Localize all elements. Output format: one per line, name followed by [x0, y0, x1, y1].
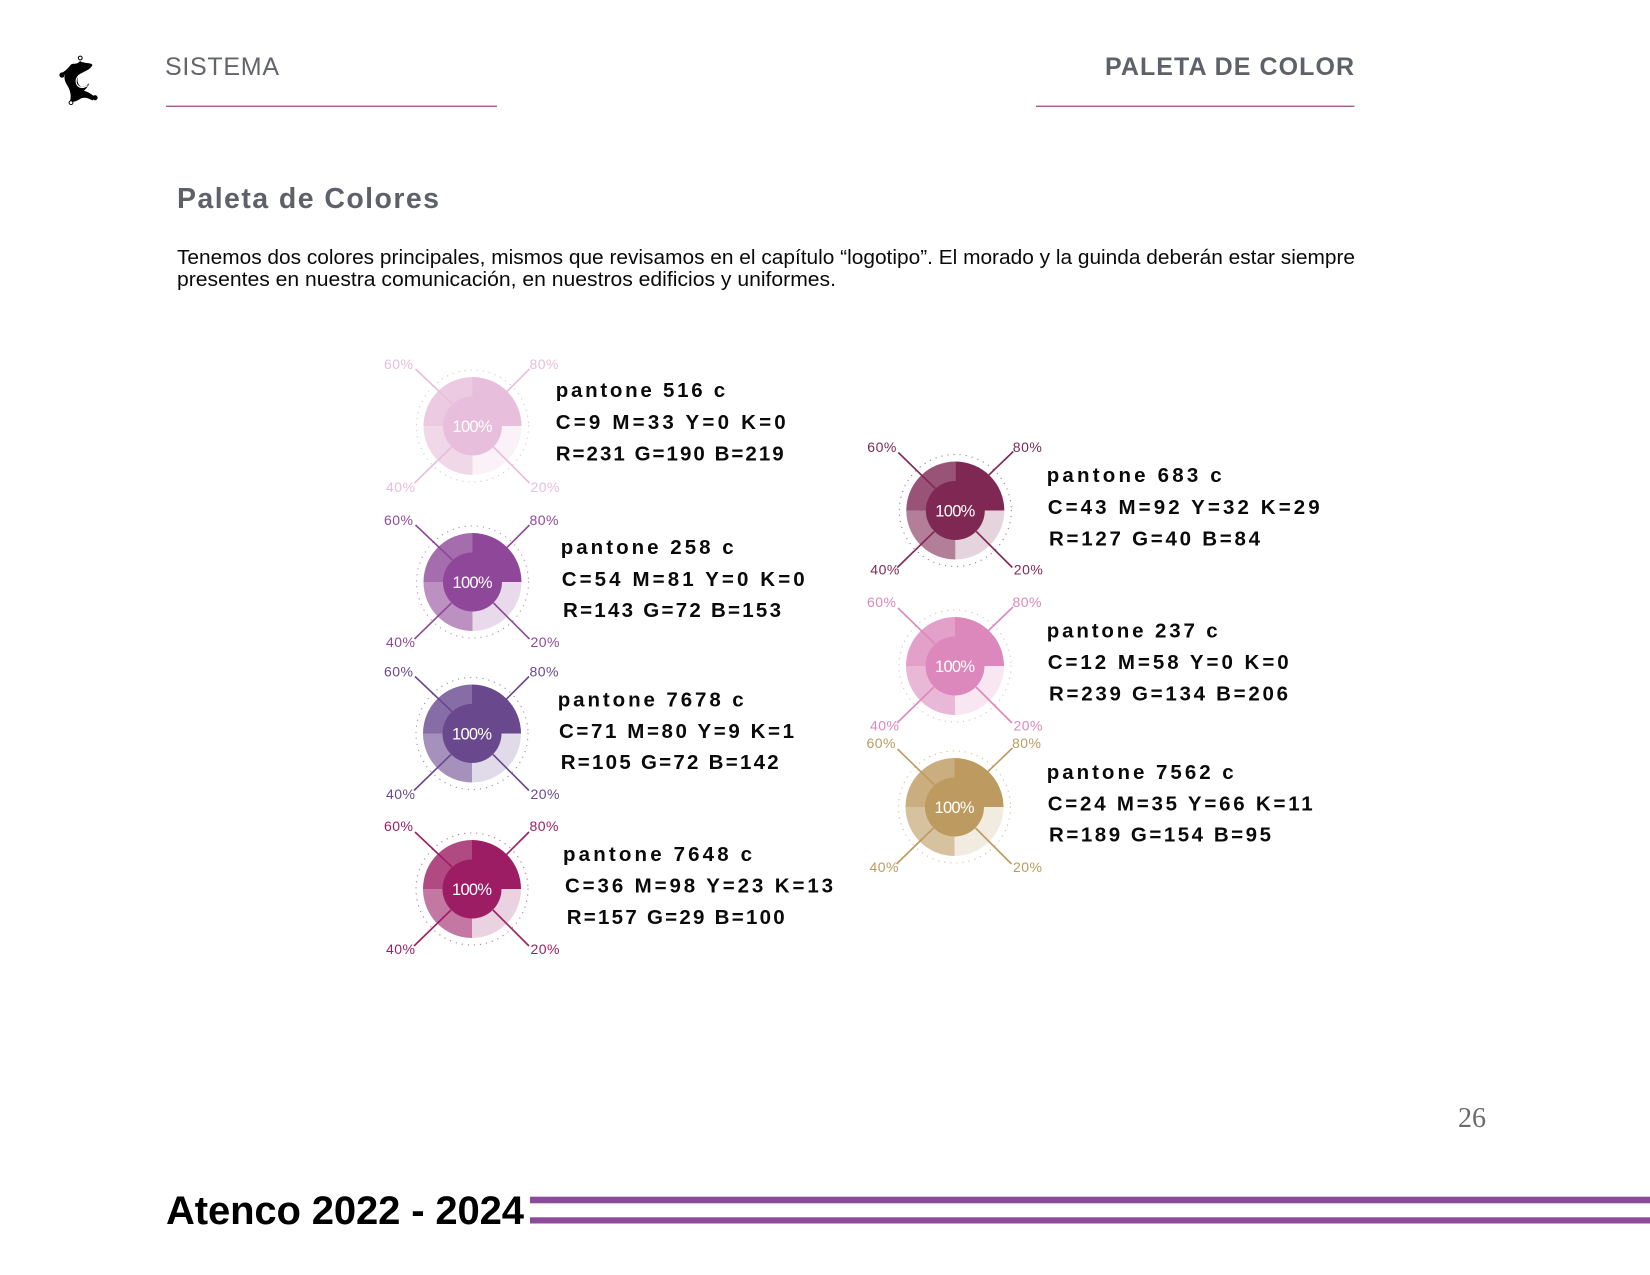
color wheel: pantone 7562 c: 20% — [1013, 859, 1042, 875]
color wheel: pantone 7648 c — [384, 818, 560, 957]
color wheel: pantone 683 c — [867, 439, 1043, 578]
color wheel: pantone 258 c: 20% — [530, 634, 560, 650]
color data: pantone 516 c — [556, 379, 786, 466]
color wheel: pantone 683 c: 40% — [870, 562, 899, 578]
color data: pantone 7648 c: C=36 M=98 Y=23 K=13 — [565, 875, 833, 898]
color wheel: pantone 683 c: 100% — [935, 502, 976, 520]
color wheel: pantone 7678 c: 100% — [452, 726, 492, 744]
footer title: Atenco 2022 - 2024 — [166, 1189, 525, 1233]
color wheel: pantone 516 c: 60% — [384, 356, 413, 372]
color data: pantone 237 c — [1047, 620, 1289, 706]
intro paragraph: presentes en nuestra comunicación, en nuestros edificios y uniformes. — [177, 268, 836, 291]
color wheel: pantone 237 c: 20% — [1014, 718, 1042, 734]
color data: pantone 516 c: C=9 M=33 Y=0 K=0 — [556, 411, 786, 434]
color data: pantone 258 c — [561, 536, 805, 622]
color data: pantone 258 c: R=143 G=72 B=153 — [563, 599, 781, 622]
color wheel: pantone 7648 c: 100% — [452, 881, 492, 899]
color wheel: pantone 7678 c: 40% — [386, 786, 415, 802]
color data: pantone 7562 c: C=24 M=35 Y=66 K=11 — [1048, 793, 1313, 816]
color wheel: pantone 7648 c: 60% — [384, 818, 413, 834]
color wheel: pantone 258 c: 60% — [384, 512, 413, 528]
color wheel: pantone 7562 c: 60% — [866, 735, 896, 751]
color data: pantone 683 c: pantone 683 c — [1047, 464, 1222, 487]
color data: pantone 7562 c: pantone 7562 c — [1047, 761, 1234, 784]
color wheel: pantone 683 c: 20% — [1014, 562, 1043, 578]
color wheel: pantone 7562 c: 80% — [1012, 735, 1041, 751]
color data: pantone 7648 c: R=157 G=29 B=100 — [567, 906, 785, 929]
color wheel: pantone 516 c: 20% — [530, 479, 560, 495]
heading: Paleta de Colores — [177, 183, 439, 215]
color wheel: pantone 237 c — [867, 594, 1042, 734]
color wheel: pantone 7648 c: 80% — [530, 818, 558, 834]
color wheel: pantone 7562 c: 40% — [870, 859, 898, 875]
color wheel: pantone 237 c: 60% — [867, 594, 896, 610]
header: paleta de color: PALETA DE COLOR — [1105, 53, 1354, 81]
page number: 26 — [1458, 1103, 1486, 1134]
color wheel: pantone 7678 c: 20% — [530, 786, 560, 802]
color data: pantone 258 c: pantone 258 c — [561, 536, 734, 559]
color wheel: pantone 516 c: 80% — [530, 356, 558, 372]
intro paragraph: Tenemos dos colores principales, mismos que revisamos en el capítulo “logotipo”. El morado y la guinda deberán estar siempre — [177, 246, 1355, 269]
color wheel: pantone 258 c: 80% — [530, 512, 558, 528]
color data: pantone 237 c: R=239 G=134 B=206 — [1049, 683, 1288, 706]
footer bars — [530, 1197, 1650, 1224]
color wheel: pantone 516 c: 40% — [386, 479, 415, 495]
color data: pantone 7678 c: pantone 7678 c — [558, 689, 744, 712]
color wheel: pantone 258 c: 100% — [452, 574, 493, 592]
color data: pantone 7648 c: pantone 7648 c — [563, 843, 752, 866]
color wheel: pantone 7648 c: 40% — [386, 941, 415, 957]
color wheel: pantone 516 c — [384, 356, 560, 495]
color wheel: pantone 683 c: 80% — [1013, 439, 1042, 455]
color data: pantone 7678 c: C=71 M=80 Y=9 K=1 — [559, 720, 794, 743]
header: sistema: SISTEMA — [165, 53, 279, 81]
color data: pantone 683 c — [1047, 464, 1320, 551]
color data: pantone 516 c: pantone 516 c — [556, 379, 725, 402]
color wheel: pantone 683 c: 60% — [867, 439, 896, 455]
color wheel: pantone 237 c: 80% — [1012, 594, 1042, 610]
color wheel: pantone 237 c: 100% — [935, 658, 975, 676]
color wheel: pantone 7562 c: 100% — [934, 799, 975, 817]
color wheel: pantone 237 c: 40% — [870, 718, 899, 734]
color data: pantone 258 c: C=54 M=81 Y=0 K=0 — [562, 568, 805, 591]
color data: pantone 7648 c — [563, 843, 833, 929]
color wheel: pantone 258 c — [384, 512, 560, 650]
icon: logo — [59, 56, 98, 105]
color data: pantone 516 c: R=231 G=190 B=219 — [556, 443, 784, 466]
color data: pantone 237 c: pantone 237 c — [1047, 620, 1218, 643]
color wheel: pantone 516 c: 100% — [452, 418, 493, 436]
color data: pantone 683 c: C=43 M=92 Y=32 K=29 — [1048, 496, 1320, 519]
color data: pantone 683 c: R=127 G=40 B=84 — [1049, 528, 1261, 551]
color data: pantone 7562 c — [1047, 761, 1313, 847]
color wheel: pantone 7562 c — [866, 735, 1042, 875]
color data: pantone 7678 c: R=105 G=72 B=142 — [561, 751, 779, 774]
color data: pantone 7678 c — [558, 689, 794, 774]
color wheel: pantone 7678 c: 80% — [530, 664, 558, 680]
color data: pantone 237 c: C=12 M=58 Y=0 K=0 — [1048, 651, 1289, 674]
color wheel: pantone 258 c: 40% — [386, 634, 415, 650]
intro paragraph — [177, 246, 1355, 291]
color wheel: pantone 7678 c — [384, 664, 560, 802]
color data: pantone 7562 c: R=189 G=154 B=95 — [1049, 824, 1271, 847]
color wheel: pantone 7678 c: 60% — [384, 664, 413, 680]
color wheel: pantone 7648 c: 20% — [530, 941, 560, 957]
